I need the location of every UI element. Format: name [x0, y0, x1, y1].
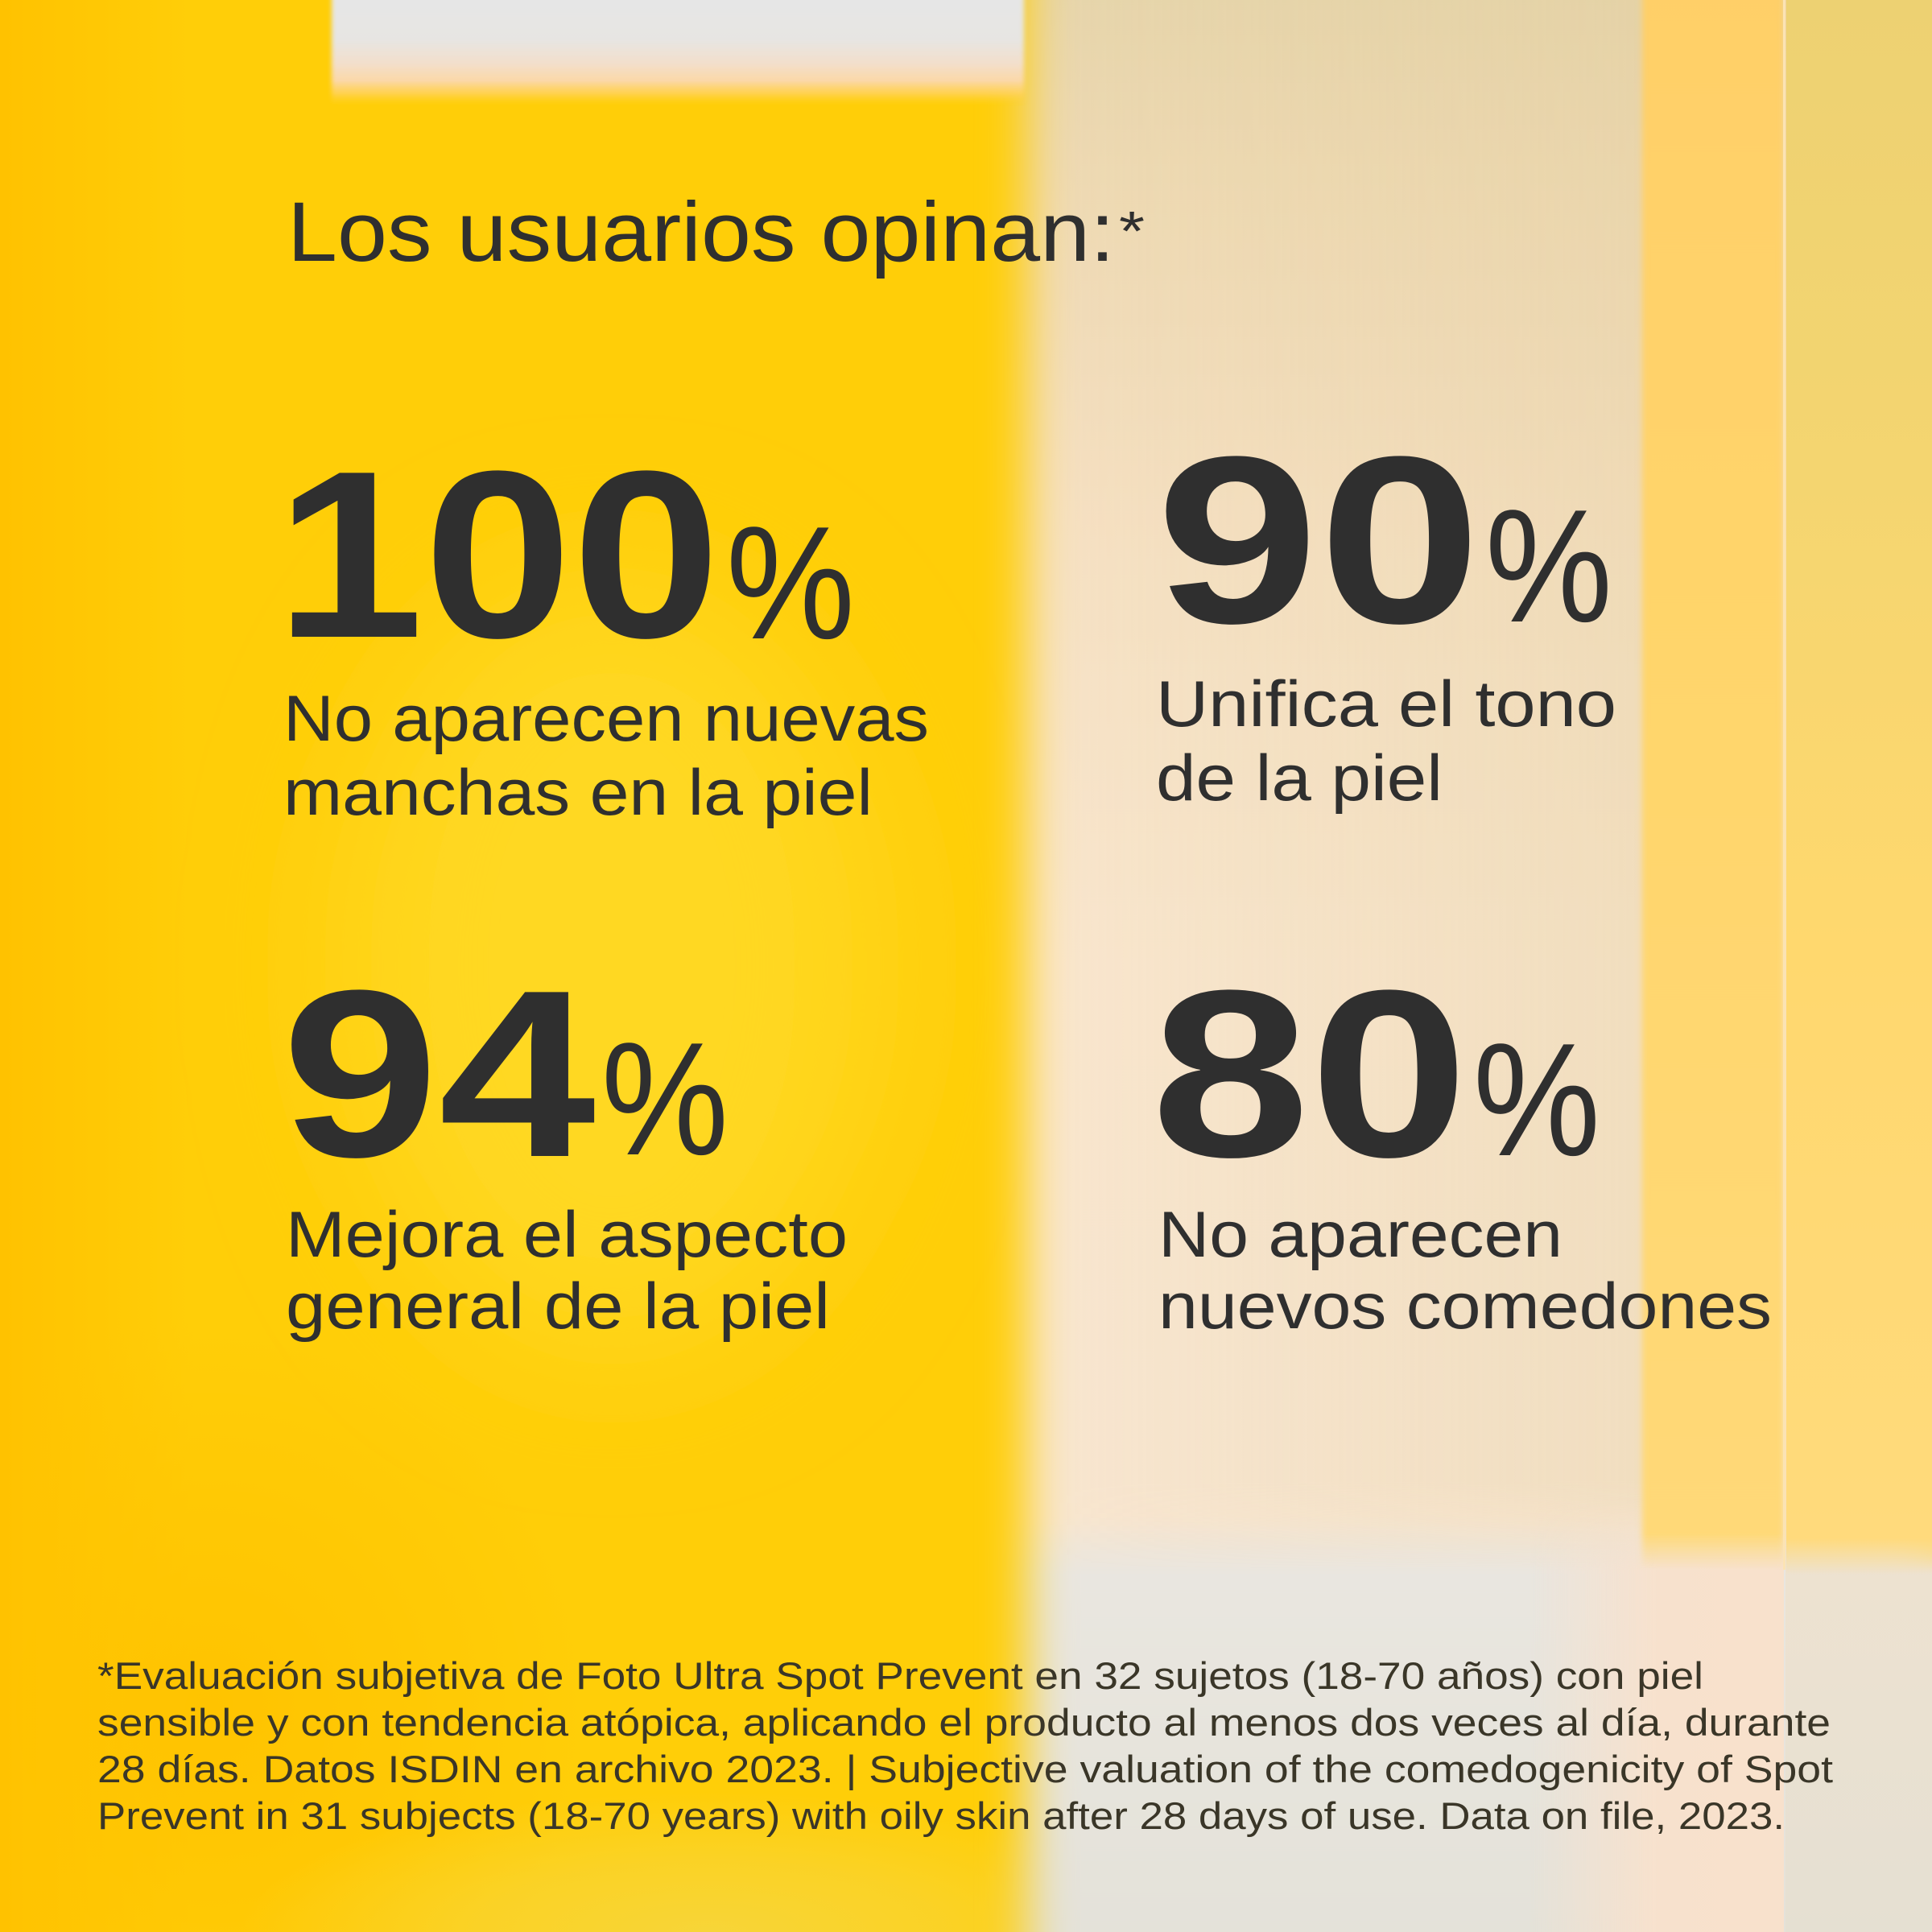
description: no new comedones: No aparecen: [1158, 1199, 1563, 1271]
heading: *: [1119, 200, 1145, 262]
description: improves overall look: [286, 1199, 848, 1343]
footnote: 28 días. Datos ISDIN en archivo 2023. | Subjective valuation of the comedogenicity of Spot: [97, 1748, 1833, 1790]
heading: Los usuarios opinan:: [287, 185, 1115, 279]
value: 94%: [282, 940, 729, 1207]
value: 90%: [1156, 407, 1612, 673]
stat: 94%: [282, 940, 848, 1343]
description: evens skin tone: Unifica el tono: [1156, 668, 1616, 741]
description: no new spots: [283, 683, 929, 829]
value: 90%: %: [1485, 477, 1612, 656]
value: 90%: 90: [1156, 407, 1481, 673]
description: improves overall look: Mejora el aspecto: [286, 1199, 848, 1271]
stat: 80%: [1151, 940, 1772, 1343]
footnote: [97, 1654, 1833, 1837]
value: 80%: %: [1473, 1010, 1600, 1190]
value: 100%: [275, 421, 855, 687]
description: evens skin tone: [1156, 668, 1616, 815]
footnote: Prevent in 31 subjects (18-70 years) with oily skin after 28 days of use. Data on file, 2023.: [97, 1794, 1785, 1837]
footnote: sensible y con tendencia atópica, aplicando el producto al menos dos veces al día, durante: [97, 1701, 1831, 1744]
value: 80%: 80: [1151, 940, 1468, 1207]
description: evens skin tone: de la piel: [1156, 742, 1443, 815]
description: no new comedones: [1158, 1199, 1772, 1343]
value: 100%: %: [726, 493, 855, 673]
value: 94%: 94: [282, 940, 597, 1207]
description: no new comedones: nuevos comedones: [1158, 1270, 1772, 1343]
description: improves overall look: general de la piel: [286, 1270, 830, 1343]
value: 94%: %: [601, 1009, 729, 1189]
stat: 100%: [275, 421, 929, 829]
footnote: *Evaluación subjetiva de Foto Ultra Spot Prevent en 32 sujetos (18-70 años) con piel: [97, 1654, 1703, 1697]
value: 100%: 100: [275, 421, 720, 687]
description: no new spots: No aparecen nuevas: [283, 683, 929, 755]
value: 80%: [1151, 940, 1600, 1207]
stat: 90%: [1156, 407, 1616, 815]
description: no new spots: manchas en la piel: [283, 757, 873, 829]
